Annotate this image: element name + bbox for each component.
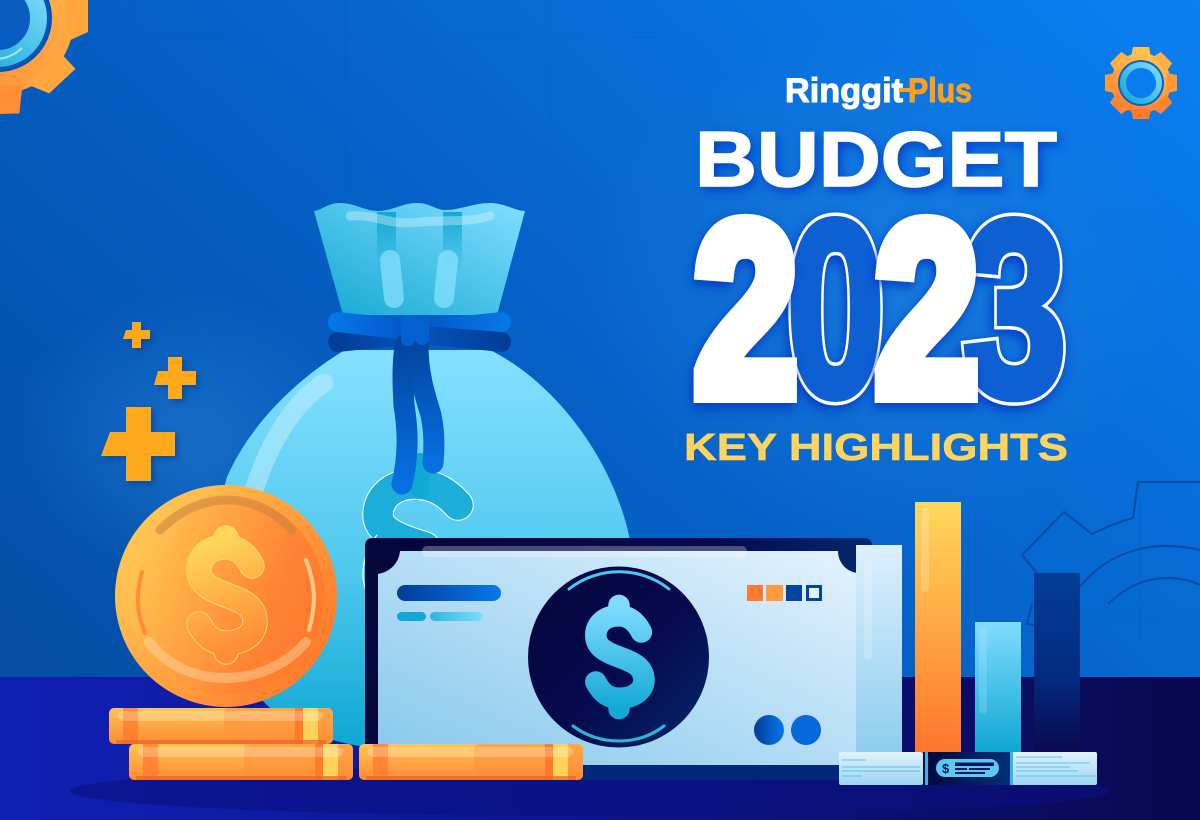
note frame — [365, 538, 872, 770]
coin stack bar bottom left — [129, 744, 353, 780]
icon: note dollar — [596, 605, 644, 709]
tie knot — [401, 315, 429, 346]
note paper — [378, 551, 858, 765]
paper band — [923, 752, 1012, 785]
bag tie — [328, 312, 511, 352]
notch behind bars — [840, 752, 860, 759]
logo: RinggitPlus: Plus — [908, 72, 972, 110]
coin side glints — [138, 560, 314, 633]
bag highlight — [254, 383, 324, 490]
money bag — [215, 203, 630, 750]
icon: coin dollar — [199, 538, 255, 652]
background gear outline — [1022, 482, 1200, 625]
note title pill — [397, 585, 501, 601]
coin stack bar bottom right — [359, 744, 583, 780]
banknote — [365, 538, 872, 780]
glow near bag — [10, 290, 370, 590]
solid digit 2 second: 2 — [875, 173, 979, 447]
logo: RinggitPlus: Ringgit — [785, 72, 903, 110]
icon: plus signs — [101, 322, 196, 481]
notes left — [839, 752, 923, 785]
bag neck — [314, 203, 525, 315]
note bottom edge — [365, 764, 865, 780]
note dollar disc — [528, 566, 709, 748]
bag body — [215, 350, 630, 750]
stack of banknotes — [839, 752, 1097, 785]
outlined digit 0: 0 — [787, 169, 884, 448]
note small pills — [397, 612, 483, 621]
bar: dark — [1034, 573, 1080, 755]
soft background glow — [580, 20, 1180, 540]
band label pill: $ — [942, 761, 950, 776]
ground shadow — [70, 766, 1110, 816]
bag dollar emblem — [363, 462, 458, 600]
left string — [402, 345, 407, 484]
coin stack bar top — [109, 708, 333, 744]
coin bottom ring light — [149, 642, 306, 678]
bar: orange — [915, 502, 961, 752]
notes right — [1012, 752, 1097, 785]
note dots — [754, 715, 821, 745]
right string — [418, 345, 434, 463]
note colour squares — [747, 585, 820, 601]
heading: 2023 — [694, 168, 1067, 448]
coin — [115, 485, 337, 707]
coin top ring shade — [160, 500, 292, 530]
solid digit 2 first: 2 — [694, 173, 798, 447]
icon: top-left gear — [0, 0, 88, 115]
logo: RinggitPlus — [785, 72, 972, 110]
bar chart — [840, 502, 1080, 759]
neck folds — [350, 212, 490, 298]
bar: cyan — [975, 622, 1021, 752]
heading: BUDGET: BUDGET — [695, 115, 1057, 203]
note top highlight — [422, 546, 747, 557]
outlined digit 3: 3 — [963, 168, 1067, 448]
floor — [0, 677, 1200, 820]
bar: pale blue — [856, 545, 902, 752]
outlined digit 0: 0 — [787, 169, 884, 448]
outlined digit 3: 3 — [963, 168, 1067, 448]
icon: top-right gear — [1105, 47, 1177, 119]
band label pill — [936, 759, 999, 777]
heading: KEY HIGHLIGHTS: KEY HIGHLIGHTS — [684, 427, 1068, 469]
